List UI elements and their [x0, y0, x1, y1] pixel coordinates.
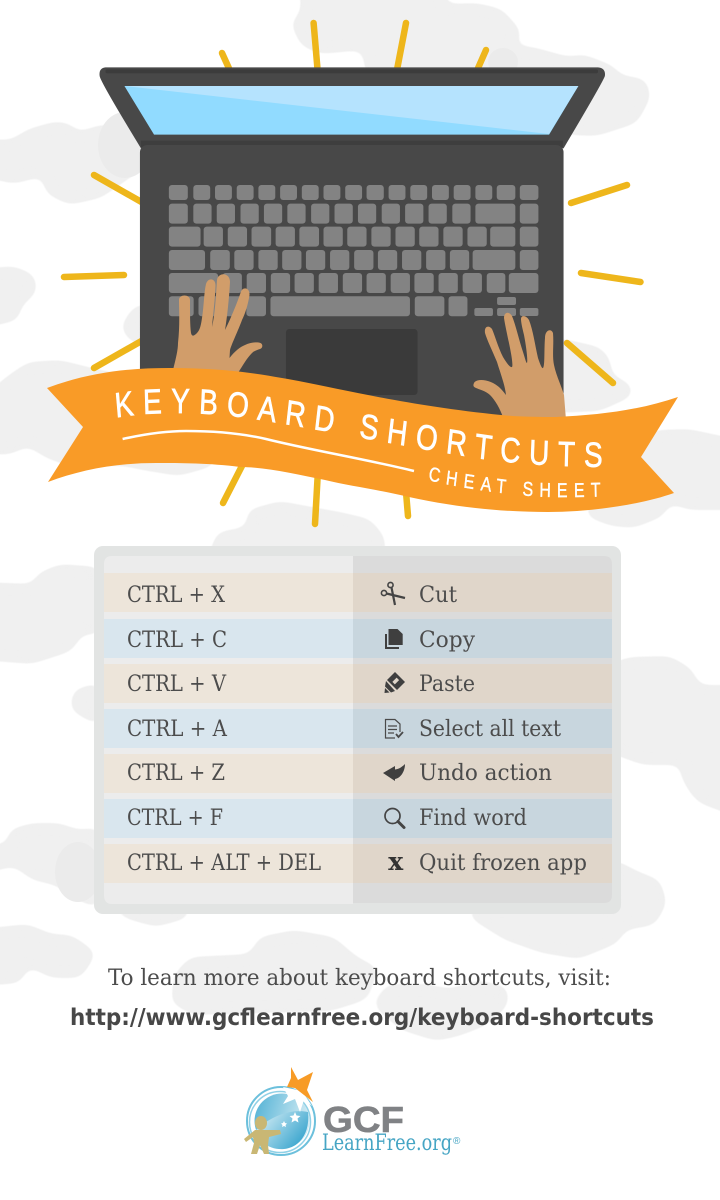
- shortcut actions: Cut: [419, 582, 457, 608]
- shortcut actions: Find word: [419, 805, 527, 831]
- shortcut keys: CTRL + ALT + DEL: [127, 850, 321, 876]
- icon: scissors: [381, 582, 405, 605]
- shortcut actions: Paste: [419, 671, 475, 697]
- shortcut keys: CTRL + C: [127, 627, 227, 653]
- title text: KEYBOARD SHORTCUTS: [116, 388, 602, 468]
- row stripes: [104, 573, 612, 883]
- keyboard: [169, 185, 538, 316]
- shortcut keys: [127, 582, 321, 876]
- sun rays: [64, 23, 640, 524]
- shortcut actions: Undo action: [419, 760, 552, 786]
- panel left column: [104, 556, 353, 904]
- shortcut keys: CTRL + V: [127, 671, 227, 697]
- cloud overlaps: [55, 48, 518, 902]
- logo figure: [244, 1116, 281, 1154]
- laptop lid: [100, 67, 605, 148]
- shortcut actions: Select all text: [419, 716, 561, 742]
- subtitle text: CHEAT SHEET: [430, 467, 600, 498]
- panel right column: [353, 556, 612, 903]
- hinge: [141, 141, 563, 147]
- footer url: http://www.gcflearnfree.org/keyboard-shortcuts: [70, 1003, 654, 1031]
- icon: undo arrow: [383, 764, 405, 781]
- laptop base: [140, 145, 564, 422]
- title underline: [123, 431, 414, 471]
- logo: GCF LearnFree.org: [244, 1067, 461, 1156]
- logo globe: [247, 1087, 315, 1155]
- shortcut actions: [419, 582, 587, 876]
- shortcut keys: CTRL + A: [127, 716, 228, 742]
- icon: right hand: [473, 313, 566, 420]
- shortcut keys: CTRL + F: [127, 805, 223, 831]
- banner ribbon: [47, 368, 678, 512]
- trackpad: [286, 329, 418, 395]
- shortcut actions: Quit frozen app: [419, 850, 587, 876]
- screen highlight: [124, 86, 578, 134]
- ribbon shape: [47, 368, 678, 512]
- logo registered mark: ®: [453, 1136, 461, 1147]
- shortcut actions: Copy: [419, 627, 475, 653]
- shortcut keys: CTRL + X: [127, 582, 225, 608]
- icon: paste: [384, 672, 405, 693]
- icon: left hand: [170, 274, 262, 395]
- logo star: [287, 1067, 313, 1102]
- icon: x: x: [388, 847, 404, 876]
- panel: shortcuts table: [94, 546, 621, 914]
- icon: copy: [385, 629, 403, 649]
- screen: [124, 86, 578, 135]
- icon: magnifier: [385, 808, 404, 828]
- footer prompt: To learn more about keyboard shortcuts, visit:: [108, 965, 611, 991]
- lid top strip: [105, 69, 598, 73]
- laptop: [100, 67, 605, 422]
- logo learnfree text: LearnFree.org: [322, 1131, 452, 1156]
- icon: select all text: [386, 720, 403, 738]
- logo wordmark: GCF: [323, 1099, 404, 1140]
- shortcut keys: CTRL + Z: [127, 760, 225, 786]
- panel frame: [94, 546, 621, 914]
